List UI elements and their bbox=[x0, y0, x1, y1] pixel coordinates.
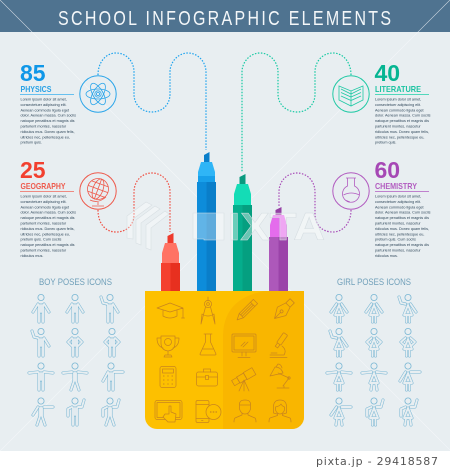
literature text: ultricies nec, pellentesque eu, bbox=[375, 135, 424, 139]
chemistry text: ridiculus mus. Donec quam felis, bbox=[375, 227, 429, 231]
icon set bbox=[155, 297, 296, 422]
physics text bbox=[20, 98, 76, 145]
physics text: consectetuer adipiscing elit. bbox=[20, 103, 67, 107]
title: SCHOOL INFOGRAPHIC ELEMENTS bbox=[58, 6, 391, 29]
chemistry text: ultricies nec, pellentesque eu, bbox=[375, 232, 424, 236]
chemistry number: 60 bbox=[374, 157, 400, 183]
marker: red bbox=[161, 233, 180, 291]
icon: telescope bbox=[231, 368, 256, 391]
chemistry text: dolor. Aenean massa. Cum sociis bbox=[375, 211, 431, 215]
panel: physics bbox=[20, 60, 116, 145]
geography text: ultricies nec, pellentesque eu, bbox=[20, 232, 70, 236]
literature text: parturient montes, nascetur bbox=[375, 124, 421, 128]
geography number: 25 bbox=[20, 157, 46, 183]
girl poses icons bbox=[327, 294, 420, 425]
chemistry text: parturient montes, nascetur bbox=[375, 248, 421, 252]
image id caption: pixta.jp - 29418587 bbox=[316, 455, 438, 468]
literature text: ridiculus mus. Donec quam felis, bbox=[375, 130, 429, 134]
header band bbox=[0, 0, 450, 32]
panel: geography bbox=[20, 157, 116, 258]
chemistry text: natoque penatibus et magnis dis bbox=[375, 216, 429, 220]
physics text: ridiculus mus. Donec quam felis, bbox=[20, 130, 74, 134]
watermark: IXTA bbox=[228, 206, 325, 249]
geography text: ridiculus mus. bbox=[20, 254, 43, 258]
physics text: Lorem ipsum dolor sit amet, bbox=[20, 98, 67, 102]
physics text: dolor. Aenean massa. Cum sociis bbox=[20, 114, 76, 118]
literature heading: LITERATURE bbox=[375, 84, 421, 94]
geography text: natoque penatibus et magnis dis bbox=[20, 243, 75, 247]
literature text bbox=[375, 98, 431, 145]
chemistry text bbox=[375, 194, 431, 258]
icon: man avatar bbox=[234, 400, 256, 422]
geography text: ridiculus mus. Donec quam felis, bbox=[20, 227, 74, 231]
chemistry text: natoque penatibus et magnis dis bbox=[375, 243, 429, 247]
chemistry text: parturient montes, nascetur bbox=[375, 222, 421, 226]
icon: fountain pen nib bbox=[270, 297, 296, 323]
literature number: 40 bbox=[374, 60, 400, 86]
geography text: consectetuer adipiscing elit. bbox=[20, 200, 67, 204]
chemistry heading: CHEMISTRY bbox=[375, 181, 417, 191]
physics text: natoque penatibus et magnis dis bbox=[20, 119, 75, 123]
icon: round flask bbox=[333, 173, 369, 209]
connector: chemistry dotted line bbox=[279, 173, 351, 232]
icon: calculator bbox=[160, 366, 176, 388]
icon: globe bbox=[80, 173, 116, 209]
geography text: pretium quis. Cum sociis bbox=[20, 238, 61, 242]
literature text: dolor. Aenean massa. Cum sociis bbox=[375, 114, 431, 118]
geography heading: GEOGRAPHY bbox=[20, 181, 66, 191]
icon: briefcase bbox=[196, 369, 218, 386]
marker: blue bbox=[197, 152, 216, 291]
physics text: parturient montes, nascetur bbox=[20, 124, 67, 128]
connector: geography dotted line bbox=[98, 173, 170, 232]
icon: atom bbox=[80, 76, 116, 112]
geography text: natoque penatibus et magnis dis bbox=[20, 216, 75, 220]
chemistry text: Lorem ipsum dolor sit amet, bbox=[375, 194, 421, 198]
heading: girl poses: GIRL POSES ICONS bbox=[337, 277, 411, 288]
connector: literature dotted line bbox=[242, 53, 351, 172]
icon: graduation cap bbox=[157, 303, 184, 318]
geography text: parturient montes, nascetur bbox=[20, 222, 67, 226]
physics number: 85 bbox=[20, 60, 46, 86]
icon: pencil bbox=[235, 299, 258, 322]
physics heading: PHYSICS bbox=[20, 84, 52, 94]
physics text: pretium quis. bbox=[20, 141, 42, 145]
icon: flask bbox=[200, 334, 216, 355]
literature text: natoque penatibus et magnis dis bbox=[375, 119, 429, 123]
literature text: pretium quis. bbox=[375, 141, 396, 145]
chemistry text: ridiculus mus. bbox=[375, 254, 398, 258]
marker: green bbox=[233, 174, 252, 291]
connector: physics dotted line bbox=[98, 53, 206, 150]
icon: compass bbox=[201, 297, 215, 324]
chemistry text: Aenean commodo ligula eget bbox=[375, 205, 425, 209]
icon: phone with chat bubble bbox=[196, 400, 221, 422]
geography text: dolor. Aenean massa. Cum sociis bbox=[20, 211, 76, 215]
icon: tablet with hand bbox=[155, 400, 182, 422]
chemistry text: pretium quis. Cum sociis bbox=[375, 238, 416, 242]
literature text: consectetuer adipiscing elit. bbox=[375, 103, 421, 107]
chemistry text: consectetuer adipiscing elit. bbox=[375, 200, 421, 204]
heading: boy poses: BOY POSES ICONS bbox=[39, 277, 112, 288]
geography text: Lorem ipsum dolor sit amet, bbox=[20, 194, 67, 198]
icon: woman avatar bbox=[269, 400, 291, 422]
icon: trophy bbox=[157, 336, 179, 357]
geography text: parturient montes, nascetur bbox=[20, 248, 67, 252]
boy poses icons bbox=[29, 294, 123, 425]
icon: monitor bbox=[232, 334, 256, 358]
icon: desk lamp bbox=[270, 364, 290, 388]
geography text: Aenean commodo ligula eget bbox=[20, 205, 70, 209]
icon: microscope bbox=[270, 333, 288, 358]
panel: literature bbox=[333, 60, 431, 145]
marker: purple bbox=[269, 207, 288, 291]
geography text bbox=[20, 194, 76, 258]
panel: chemistry bbox=[333, 157, 431, 258]
pen holder: yellow box bbox=[145, 291, 304, 429]
watermark bbox=[127, 202, 325, 250]
icon: open book bbox=[333, 76, 369, 112]
physics text: Aenean commodo ligula eget bbox=[20, 108, 70, 112]
literature text: Lorem ipsum dolor sit amet, bbox=[375, 98, 421, 102]
physics text: ultricies nec, pellentesque eu, bbox=[20, 135, 70, 139]
literature text: Aenean commodo ligula eget bbox=[375, 108, 425, 112]
